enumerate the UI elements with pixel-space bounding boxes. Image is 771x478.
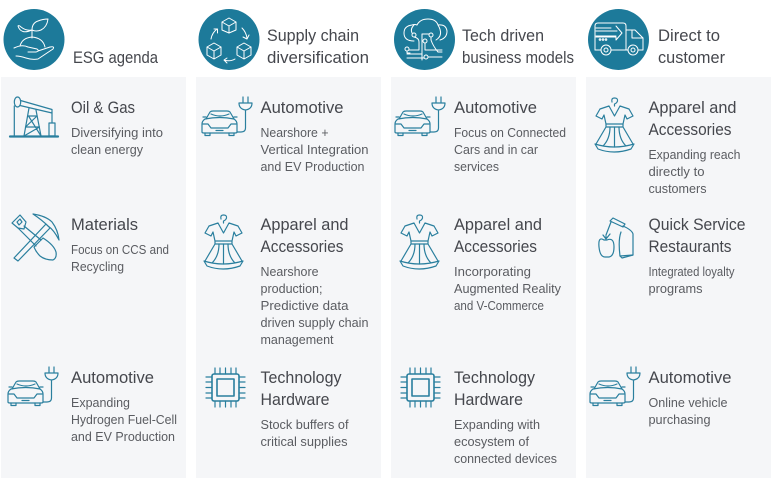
text: Technology stock buffers: critical supplies	[260, 435, 348, 449]
text: Technology ecosystem: Technology	[454, 369, 536, 387]
text: Apparel reach: Expanding reach	[648, 148, 741, 162]
icon: oil pump	[10, 97, 58, 136]
text: Automotive hydrogen: Expanding	[71, 396, 130, 410]
text: Apparel nearshore: Nearshore	[260, 265, 319, 279]
panel: Supply chain diversification	[196, 77, 381, 478]
text: Apparel nearshore	[260, 216, 369, 347]
icon: microchip	[206, 368, 245, 407]
icon: shovel and pickaxe	[12, 214, 59, 261]
text: Quick Service Restaurants	[648, 216, 746, 296]
text: Apparel nearshore: Accessories	[260, 238, 344, 256]
text: Materials: Focus on CCS and	[71, 243, 169, 257]
icon: cloud and circuit	[394, 9, 455, 70]
text: Apparel reach	[648, 99, 741, 196]
text: Automotive hydrogen	[71, 369, 177, 444]
text: Automotive hydrogen: Automotive	[71, 369, 154, 387]
heading: Supply chain diversification: Supply chain	[267, 26, 359, 45]
text: Automotive nearshore: Vertical Integration	[260, 143, 369, 157]
text: Apparel augmented reality: Augmented Reality	[454, 282, 562, 296]
text: Materials: Materials	[71, 216, 138, 234]
icon: hand holding plant	[4, 9, 64, 70]
text: Oil and Gas: Diversifying into	[71, 126, 163, 140]
icon: electric car	[202, 97, 252, 136]
text: Technology stock buffers: Stock buffers of	[260, 418, 349, 432]
text: Quick Service Restaurants: programs	[648, 282, 702, 296]
text: Technology stock buffers	[260, 369, 349, 449]
text: Automotive connected: services	[454, 160, 499, 174]
text: Automotive hydrogen: Hydrogen Fuel-Cell	[71, 413, 177, 427]
heading: Tech driven business models	[462, 26, 574, 67]
heading: Supply chain diversification	[267, 26, 369, 67]
text: Oil and Gas: clean energy	[71, 143, 144, 157]
text: Quick Service Restaurants: Quick Service	[648, 216, 746, 234]
heading: Direct to customer: Direct to	[658, 26, 720, 45]
text: Oil and Gas	[71, 99, 163, 157]
panel: Direct to customer	[586, 77, 771, 478]
text: Apparel augmented reality: Apparel and	[454, 216, 542, 234]
text: Automotive connected: Automotive	[454, 99, 537, 117]
text: Technology ecosystem: Expanding with	[454, 418, 540, 432]
text: Apparel reach: Apparel and	[648, 99, 736, 117]
panel: Tech driven business models	[391, 77, 576, 478]
text: Automotive nearshore: Automotive	[260, 99, 344, 117]
text: Technology stock buffers: Hardware	[260, 391, 330, 409]
text: Apparel augmented reality: Accessories	[454, 238, 537, 256]
icon: food bag and apple	[599, 218, 633, 258]
text: Technology ecosystem: connected devices	[454, 452, 557, 466]
text: Apparel reach: directly to	[648, 165, 705, 179]
text: Automotive nearshore: and EV Production	[260, 160, 365, 174]
text: Automotive online: purchasing	[648, 413, 711, 427]
icon: electric car	[590, 367, 640, 406]
heading: Supply chain diversification: diversification	[267, 48, 369, 67]
heading: Direct to customer: customer	[658, 48, 725, 67]
text: Apparel nearshore: production;	[260, 282, 322, 296]
text: Technology ecosystem: ecosystem of	[454, 435, 530, 449]
text: Apparel nearshore: management	[260, 333, 334, 347]
text: Apparel augmented reality	[454, 216, 562, 313]
icon: dress	[400, 215, 439, 269]
icon: microchip	[401, 368, 440, 407]
text: Automotive connected: Focus on Connected	[454, 126, 566, 140]
heading: ESG agenda: ESG agenda	[73, 48, 158, 67]
icon: dress	[595, 98, 634, 152]
heading: Tech driven business models: Tech driven	[462, 26, 544, 45]
text: Automotive online: Online vehicle	[648, 396, 728, 410]
text: Automotive nearshore	[260, 99, 369, 174]
text: Technology ecosystem: Hardware	[454, 391, 523, 409]
text: Automotive online	[648, 369, 732, 427]
text: Automotive nearshore: Nearshore +	[260, 126, 328, 140]
text: Automotive hydrogen: and EV Production	[71, 430, 175, 444]
heading: Direct to customer	[658, 26, 725, 67]
icon: electric car	[395, 97, 445, 136]
text: Apparel reach: customers	[648, 182, 706, 196]
text: Materials: Recycling	[71, 260, 124, 274]
text: Apparel augmented reality: and V-Commerce	[454, 299, 544, 313]
text: Automotive online: Automotive	[648, 369, 732, 387]
text: Automotive connected	[454, 99, 566, 174]
icon: dress	[204, 215, 243, 269]
icon: delivery truck	[588, 9, 649, 70]
heading: Tech driven business models: business models	[462, 48, 574, 67]
text: Automotive connected: Cars and in car	[454, 143, 538, 157]
panel: ESG agenda	[1, 77, 186, 478]
text: Materials	[71, 216, 169, 274]
text: Apparel nearshore: Apparel and	[260, 216, 348, 234]
text: Apparel nearshore: Predictive data	[260, 299, 349, 313]
icon: electric car	[8, 367, 58, 406]
text: Apparel reach: Accessories	[648, 121, 732, 139]
text: Apparel nearshore: driven supply chain	[260, 316, 369, 330]
text: Technology ecosystem	[454, 369, 557, 466]
text: Oil and Gas: Oil & Gas	[71, 99, 135, 117]
text: Quick Service Restaurants: Restaurants	[648, 238, 732, 256]
text: Quick Service Restaurants: Integrated loyalty	[648, 265, 735, 279]
text: Apparel augmented reality: Incorporating	[454, 265, 531, 279]
text: Technology stock buffers: Technology	[260, 369, 342, 387]
icon: supply cubes cycle	[198, 9, 260, 70]
